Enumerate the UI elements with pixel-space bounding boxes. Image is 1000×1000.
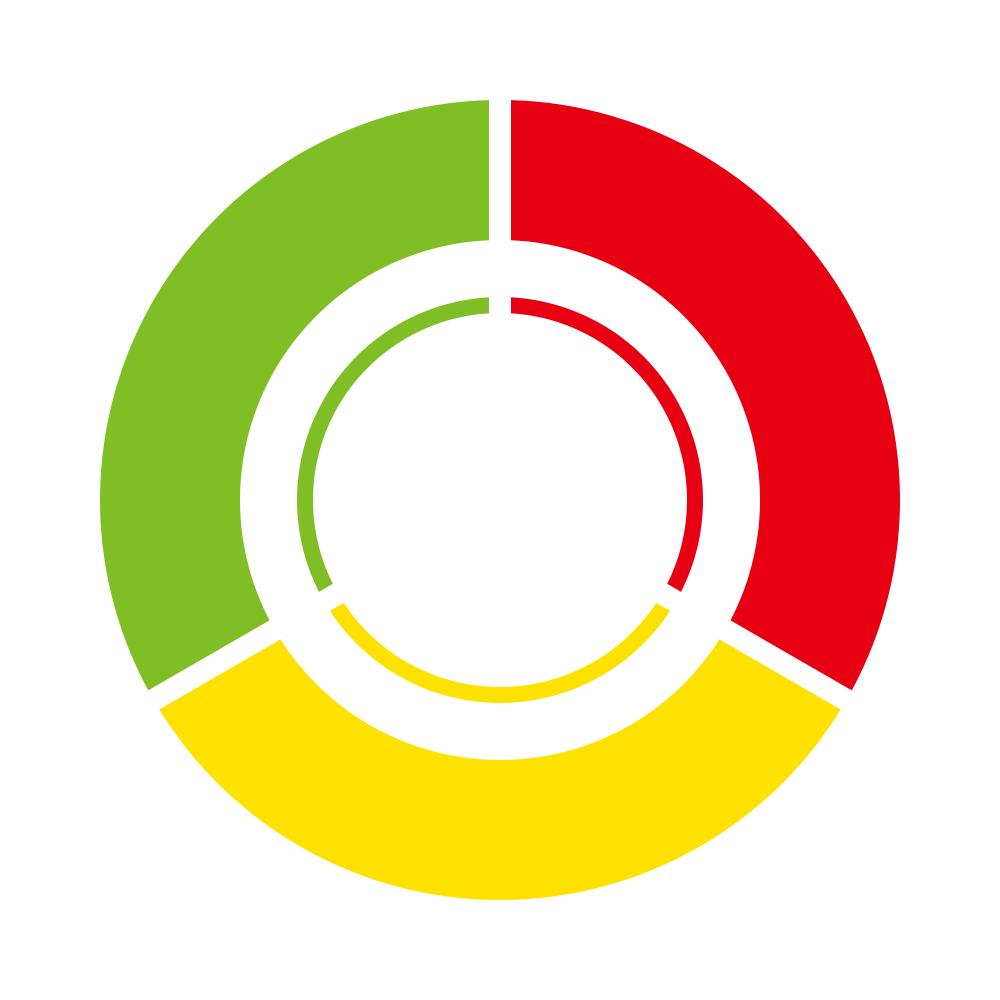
outer segment: green bbox=[100, 100, 489, 690]
inner ring bbox=[297, 297, 703, 703]
outer ring bbox=[100, 100, 900, 900]
outer segment: yellow bbox=[159, 639, 841, 900]
inner segment: green bbox=[297, 297, 489, 592]
inner segment: red bbox=[511, 297, 703, 592]
outer segment: red bbox=[511, 100, 900, 690]
inner segment: yellow bbox=[330, 603, 670, 703]
